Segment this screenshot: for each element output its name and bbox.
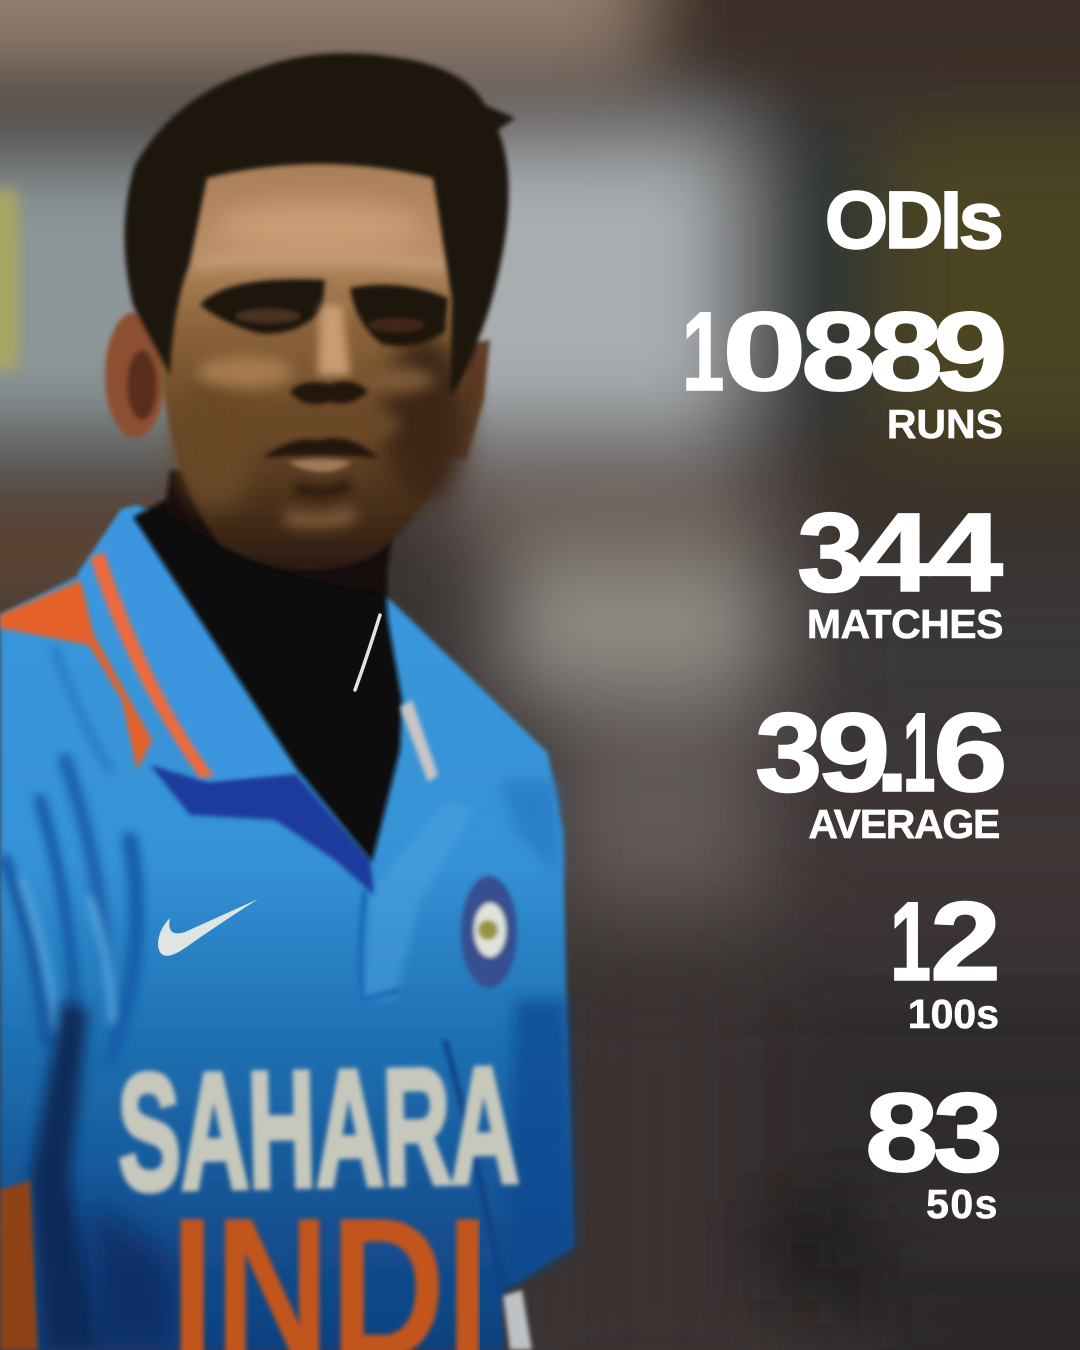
stat: average: 3: [755, 690, 823, 815]
tricolour collar tip: [400, 700, 438, 782]
player: [0, 53, 574, 1350]
stat: runs: 1: [682, 289, 724, 414]
right brow and eye: [350, 285, 448, 346]
brow ridge highlight: [195, 257, 450, 265]
placket shading: [360, 800, 475, 1000]
arm shadow gutter: [30, 1000, 100, 1350]
sponsor text on jersey: SAHARA: [116, 1032, 520, 1225]
mid-face shade: [240, 405, 400, 445]
stat: hundreds: 2: [930, 879, 1001, 1004]
stat: runs: 9: [933, 289, 1008, 414]
cheek left shade: [175, 370, 255, 510]
orange collar stripe: [90, 552, 214, 778]
stat: matches: 3: [797, 490, 865, 615]
stat: hundreds: [890, 879, 1001, 1037]
sleeve seam: [445, 1040, 505, 1300]
ear right: [440, 340, 490, 460]
neck and jaw shadow: [165, 470, 400, 592]
black undershirt: [133, 500, 402, 862]
stat: matches: 4: [927, 490, 1003, 615]
shoulder orange: [0, 580, 152, 770]
mouth: [263, 438, 378, 520]
stat: runs: 8: [800, 289, 875, 414]
face: [160, 155, 470, 570]
stat: hundreds: 100s: [908, 991, 999, 1037]
icon: cricket crest: [461, 876, 517, 988]
stat: average: 9: [817, 690, 891, 815]
navy collar underside: [150, 765, 374, 895]
stat: average: 6: [932, 690, 1007, 815]
white trousers edge: [503, 1290, 532, 1350]
left brow and eye: [200, 279, 325, 334]
sleeve wrinkles: [5, 650, 137, 1060]
stat: runs: 0: [722, 289, 807, 414]
stat: hundreds: 1: [890, 879, 931, 1004]
stat: matches: [797, 490, 1004, 647]
icon: swoosh logo: [158, 899, 258, 956]
stat: fifties: 3: [933, 1070, 1003, 1195]
white wire: [355, 615, 380, 690]
stat: runs: 8: [869, 289, 943, 414]
stat: average: .: [875, 690, 909, 815]
stat: average: [755, 690, 1007, 847]
heading: ODIs: ODIs: [825, 175, 1000, 266]
forehead highlight: [215, 202, 425, 254]
right sleeve shade: [505, 1000, 574, 1290]
cheek highlight right: [366, 368, 434, 392]
stat: fifties: 8: [865, 1070, 938, 1195]
stat: matches: 4: [858, 490, 932, 615]
jersey body: [0, 505, 574, 1350]
nose: [290, 305, 368, 404]
collar left: [78, 510, 296, 780]
stat: runs: RUNS: [887, 401, 1003, 447]
stat: average: AVERAGE: [808, 801, 999, 847]
hair: [124, 53, 515, 395]
ear left: [105, 312, 165, 438]
stat: runs: [682, 289, 1008, 447]
stat: average: 1: [903, 690, 935, 815]
cheek right shade: [383, 335, 467, 505]
cheek highlight left: [197, 356, 293, 388]
stat: matches: MATCHES: [807, 601, 1003, 647]
stat: fifties: [865, 1070, 1003, 1227]
lower left shadow: [90, 1200, 180, 1350]
stat: fifties: 50s: [926, 1181, 999, 1227]
